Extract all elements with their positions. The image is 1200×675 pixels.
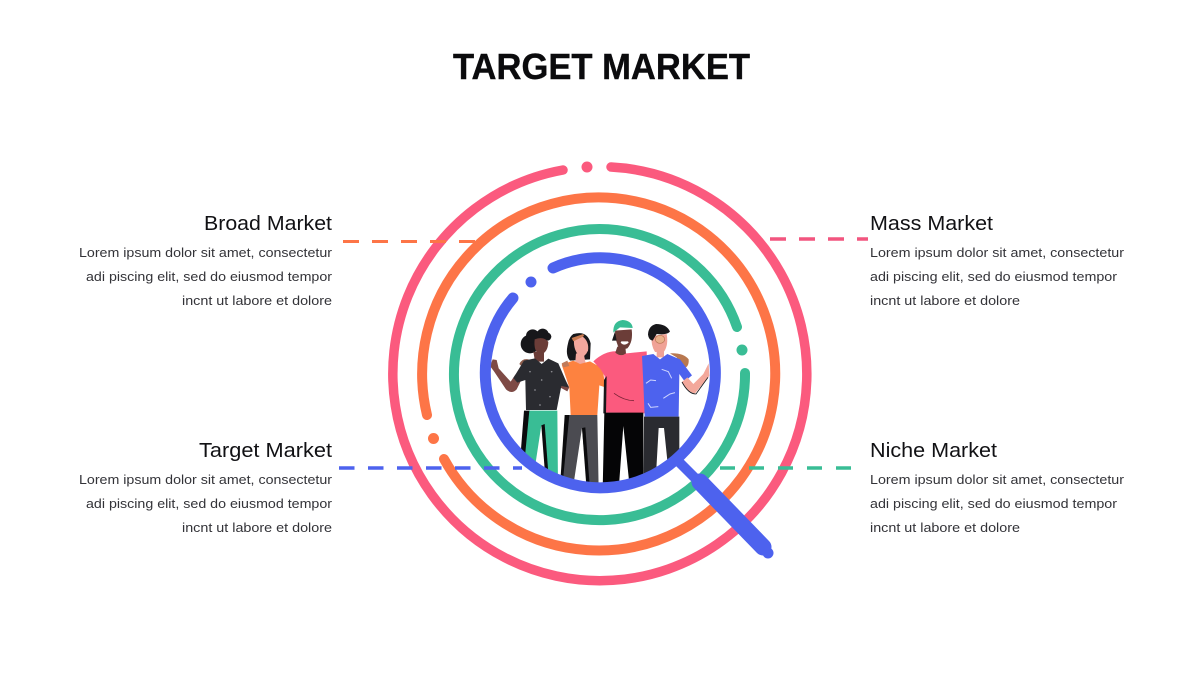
text block: Broad Market: adi piscing elit, sed do eiusmod tempor: [86, 269, 333, 284]
text block: Mass Market: Lorem ipsum dolor sit amet, consectetur: [870, 245, 1125, 260]
text block: Niche Market: adi piscing elit, sed do eiusmod tempor: [870, 496, 1118, 511]
dashed connector: blue: [339, 466, 522, 470]
text block: Broad Market: [79, 213, 333, 308]
text block: Niche Market: [870, 440, 1125, 535]
dashed connector: orange: [343, 240, 480, 243]
text block: Target Market: Target Market: [199, 440, 332, 462]
text block: Broad Market: Broad Market: [204, 213, 332, 235]
text block: Niche Market: Lorem ipsum dolor sit amet, consectetur: [870, 472, 1125, 487]
text block: Mass Market: adi piscing elit, sed do eiusmod tempor: [870, 269, 1118, 284]
handle tip: [762, 548, 774, 558]
text block: Target Market: incnt ut labore et dolore: [182, 520, 332, 535]
person 4: [642, 324, 709, 487]
text block: Target Market: [79, 440, 333, 535]
person 2: [560, 333, 605, 490]
lens dot: [526, 276, 536, 288]
text block: Target Market: adi piscing elit, sed do eiusmod tempor: [86, 496, 333, 511]
concentric target rings: [393, 162, 807, 581]
text block: Target Market: Lorem ipsum dolor sit amet, consectetur: [79, 472, 333, 487]
magnifying glass: [485, 258, 774, 558]
handle grip: [700, 482, 763, 547]
text block: Broad Market: incnt ut labore et dolore: [182, 293, 332, 308]
person 3: [593, 320, 648, 490]
dashed connector: green: [720, 466, 852, 470]
text block: Mass Market: Mass Market: [870, 213, 993, 235]
text block: Niche Market: incnt ut labore et dolore: [870, 520, 1020, 535]
lens ring: [485, 258, 715, 488]
text block: Mass Market: [870, 213, 1125, 308]
ring: orange: [422, 197, 775, 550]
ring: green: [454, 229, 748, 520]
dashed connector: pink: [770, 237, 868, 241]
text block: Mass Market: incnt ut labore et dolore: [870, 293, 1020, 308]
people illustration: [490, 320, 709, 490]
text block: Broad Market: Lorem ipsum dolor sit amet, consectetur: [79, 245, 333, 260]
person 1: [490, 329, 569, 487]
title: TARGET MARKET: [453, 46, 750, 87]
handle neck: [677, 460, 700, 483]
text block: Niche Market: Niche Market: [870, 440, 997, 462]
ring: broad pink: [393, 162, 807, 581]
